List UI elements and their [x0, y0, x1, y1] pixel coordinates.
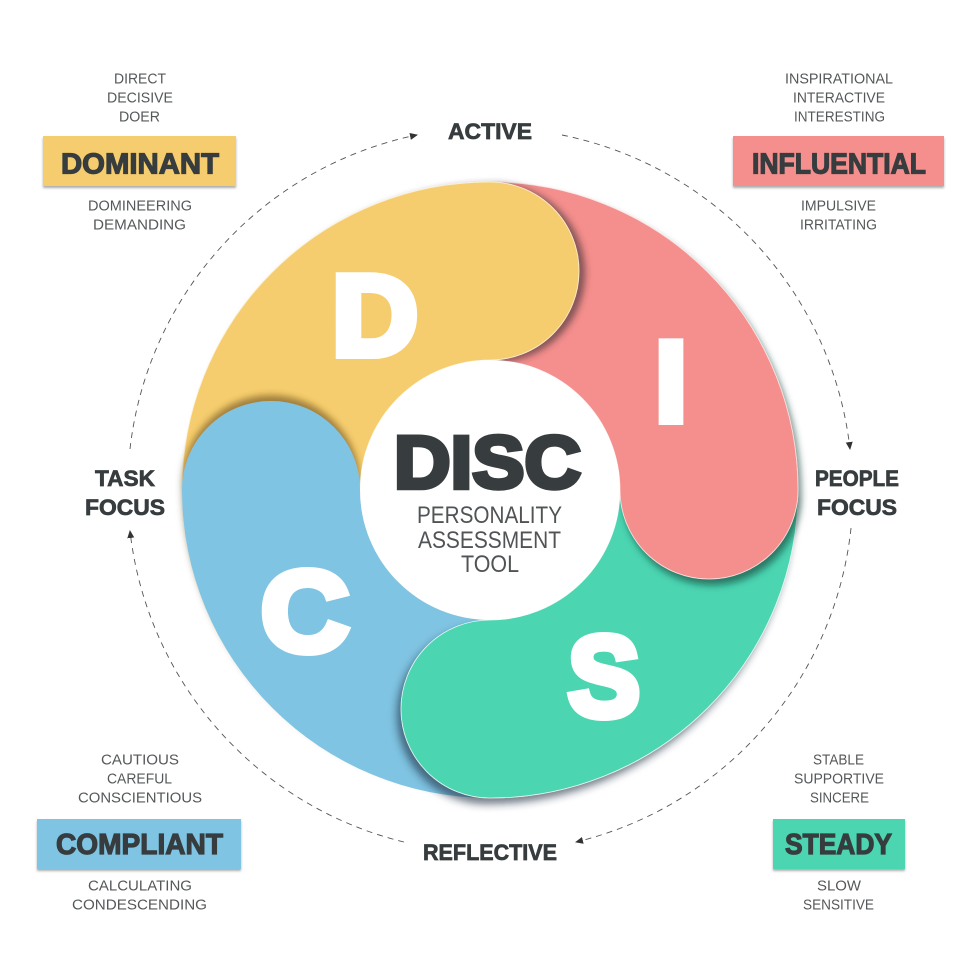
compliant negatives: CALCULATING — [88, 878, 192, 894]
letter D: D — [332, 253, 418, 380]
compliant negatives: CONDESCENDING — [72, 896, 207, 914]
compliant negatives — [72, 878, 207, 914]
segment: S teal tail — [505, 497, 800, 810]
steady negatives: SLOW — [817, 878, 862, 894]
axis label: task focus — [85, 466, 165, 520]
dominant label box — [43, 136, 236, 186]
compliant traits — [78, 752, 202, 806]
steady traits: SUPPORTIVE — [794, 770, 884, 788]
steady label box — [773, 819, 905, 869]
dominant label: DOMINANT — [61, 148, 219, 180]
influential negatives: IMPULSIVE — [801, 198, 876, 214]
center title: DISC — [394, 421, 581, 504]
center subtitle — [417, 502, 562, 578]
influential label: INFLUENTIAL — [752, 148, 926, 180]
dominant traits: DIRECT — [114, 70, 166, 88]
compliant traits: CAUTIOUS — [101, 752, 179, 768]
center circle — [360, 360, 620, 620]
influential traits: INSPIRATIONAL — [785, 70, 893, 88]
influential negatives — [800, 198, 877, 234]
dashed arc: task focus to active — [130, 135, 417, 449]
dominant negatives: DOMINEERING — [88, 198, 192, 214]
callout: compliant — [37, 752, 241, 914]
influential traits: INTERACTIVE — [793, 90, 885, 106]
axis label: people focus: FOCUS — [817, 495, 897, 520]
segment: I pink — [490, 182, 798, 579]
callout: influential — [733, 70, 944, 234]
dashed arc: people focus to reflective — [576, 528, 851, 842]
axis label: people focus: PEOPLE — [815, 466, 899, 491]
steady label: STEADY — [785, 829, 892, 861]
dominant traits: DOER — [119, 108, 160, 126]
callout: steady — [773, 752, 905, 914]
dominant negatives — [88, 198, 192, 234]
letter S: S — [568, 614, 640, 741]
axis label: reflective: REFLECTIVE — [423, 840, 557, 865]
dashed arc: reflective to task focus — [130, 531, 404, 842]
dominant negatives: DEMANDING — [93, 216, 186, 234]
compliant traits: CAREFUL — [107, 770, 172, 788]
segment: C blue — [182, 401, 490, 798]
influential negatives: IRRITATING — [800, 216, 877, 234]
center subtitle: ASSESSMENT — [418, 527, 561, 554]
callout: dominant — [43, 70, 236, 234]
letter I: I — [655, 319, 687, 446]
compliant label: COMPLIANT — [56, 829, 223, 861]
steady traits — [794, 752, 884, 806]
segment: D yellow — [182, 182, 579, 490]
influential traits: INTERESTING — [794, 108, 885, 126]
compliant traits: CONSCIENTIOUS — [78, 790, 202, 806]
steady traits: STABLE — [813, 752, 864, 768]
steady negatives — [803, 878, 874, 914]
compliant label box — [37, 819, 241, 869]
axis label: task focus: TASK — [95, 466, 155, 491]
letter C: C — [261, 549, 349, 676]
axis label: people focus — [815, 466, 899, 520]
axis label: task focus: FOCUS — [85, 495, 165, 520]
dominant traits: DECISIVE — [107, 90, 173, 106]
steady traits: SINCERE — [810, 790, 869, 806]
segment: S teal cap overlapping C — [392, 619, 505, 810]
influential label box — [733, 136, 944, 186]
influential traits — [785, 70, 893, 126]
axis label: active: ACTIVE — [448, 119, 532, 144]
center subtitle: PERSONALITY — [417, 502, 562, 529]
center subtitle: TOOL — [461, 551, 519, 578]
steady negatives: SENSITIVE — [803, 896, 874, 914]
dashed arc: active to people focus — [562, 135, 850, 449]
dominant traits — [107, 70, 173, 126]
